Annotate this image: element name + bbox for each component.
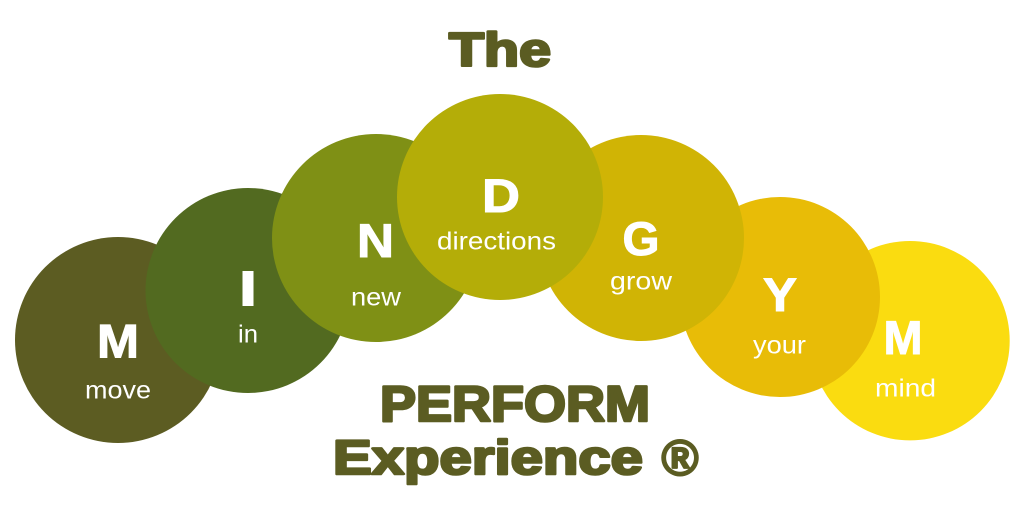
letter: N: N [357, 214, 394, 267]
word: new: new [351, 284, 402, 312]
word: grow: grow [610, 268, 673, 296]
heading: PERFORM Experience [333, 376, 699, 486]
circle: D directions [397, 94, 603, 300]
word: directions: directions [437, 228, 556, 256]
letter: M: M [97, 314, 139, 368]
circle: M mind [810, 241, 1010, 440]
word: your: your [753, 332, 806, 360]
circle: N new [272, 134, 480, 342]
heading: PERFORM Experience: PERFORM [380, 376, 650, 432]
word: mind: mind [875, 374, 936, 402]
circle: Y your [680, 197, 880, 397]
heading: The: The [449, 23, 551, 76]
circle: G grow [538, 135, 744, 341]
letter: D: D [482, 169, 520, 222]
word: move: move [85, 376, 151, 404]
heading: PERFORM Experience: ® [662, 430, 699, 486]
word: in: in [238, 320, 258, 348]
letter: I [242, 271, 254, 306]
circle: M move [15, 237, 221, 443]
letter: Y: Y [763, 268, 797, 321]
letter: G: G [622, 212, 660, 265]
circle: I in [146, 188, 350, 393]
heading: PERFORM Experience: Experience [333, 432, 643, 485]
letter: M: M [884, 311, 922, 364]
